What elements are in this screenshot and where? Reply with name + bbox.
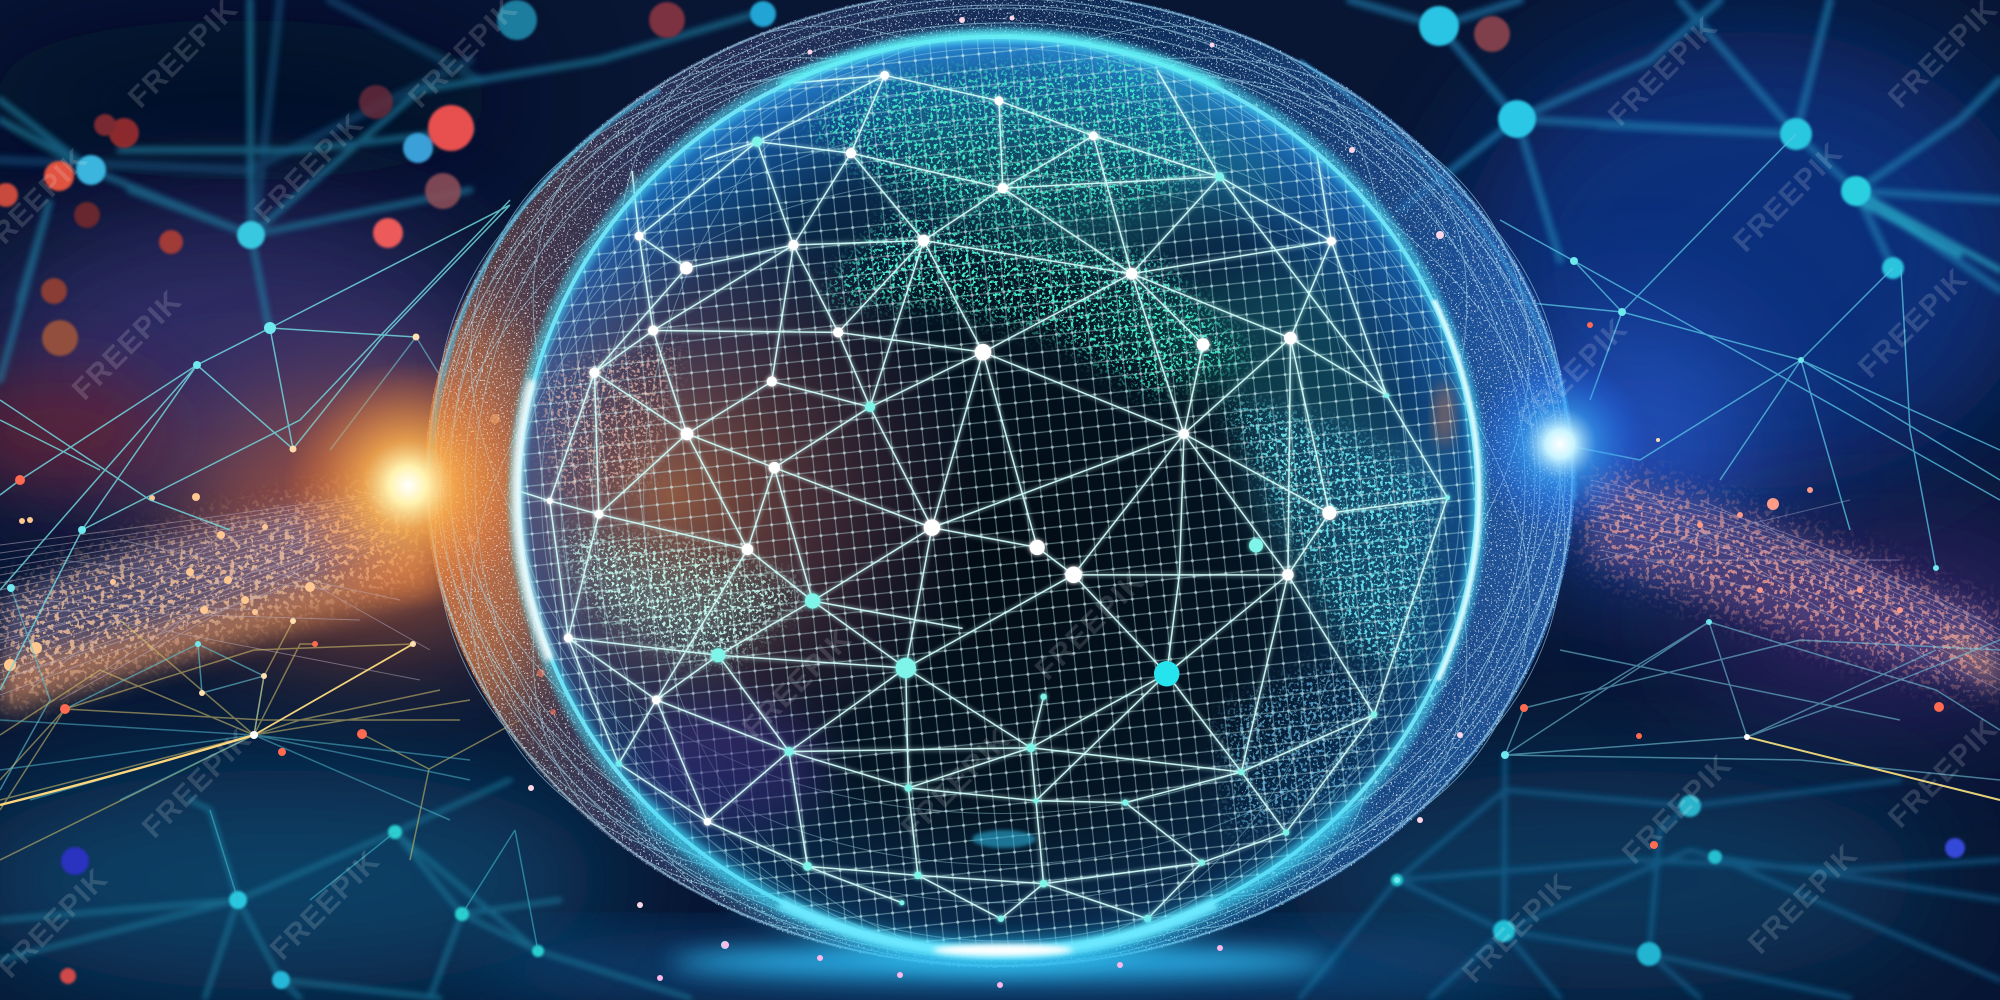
- watermark: FREEPIK: [248, 107, 371, 230]
- bottom glow: [640, 805, 1356, 988]
- large cyan node: [1154, 661, 1179, 686]
- watermark: FREEPIK: [1616, 748, 1739, 871]
- sharp network right: [1500, 134, 2000, 800]
- watermark: FREEPIK: [1512, 312, 1635, 435]
- watermark: FREEPIK: [136, 722, 259, 845]
- sharp network left: [0, 200, 538, 951]
- watermark: FREEPIK: [895, 722, 1018, 845]
- globe mesh, continents and links: [513, 32, 1489, 957]
- left data stream: [0, 480, 440, 715]
- network nodes: [547, 71, 1450, 923]
- watermark: FREEPIK: [264, 844, 387, 967]
- right data stream: [1590, 470, 2000, 690]
- watermark: FREEPIK: [1727, 136, 1850, 259]
- warm tint on shell: [426, 283, 554, 744]
- watermark: FREEPIK: [1029, 564, 1152, 687]
- orange glow left: [283, 360, 533, 610]
- watermark: FREEPIK: [736, 622, 859, 745]
- watermark: FREEPIK: [1456, 867, 1579, 990]
- blue glow right: [1472, 356, 1648, 532]
- watermark: FREEPIK: [1852, 262, 1975, 385]
- watermark: FREEPIK: [1742, 838, 1865, 961]
- small node dots: [7, 257, 1944, 883]
- globe rim: [517, 35, 1479, 953]
- network links: [519, 70, 1447, 919]
- watermark: FREEPIK: [66, 284, 189, 407]
- outer glass shell: [390, 0, 1580, 970]
- globe: [513, 32, 1489, 957]
- watermark: FREEPIK: [1602, 10, 1725, 133]
